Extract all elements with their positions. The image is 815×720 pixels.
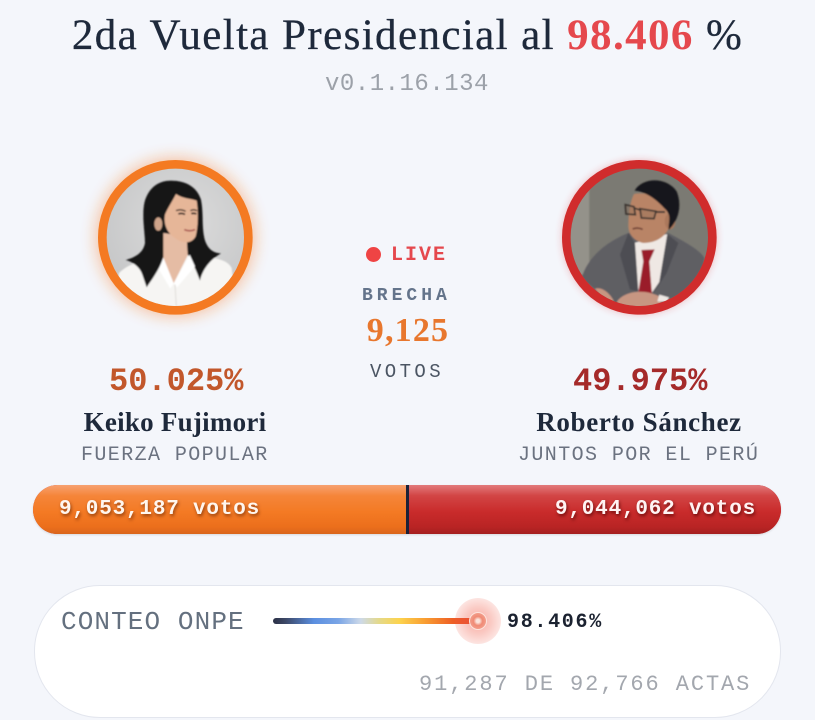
- suit: [582, 233, 704, 308]
- shirt: [118, 254, 233, 306]
- candidate name: Fujimori: Keiko Fujimori: [84, 407, 266, 437]
- candidate percent: Fujimori: 50.025%: [109, 363, 243, 400]
- votes: Sánchez: 9,044,062 votos: [555, 498, 756, 521]
- lapels: [620, 233, 678, 295]
- face: [165, 194, 198, 242]
- version label: v0.1.16.134: [325, 71, 489, 98]
- gap value: 9,125: [367, 312, 449, 349]
- panel: conteo ONPE: [34, 585, 781, 718]
- ear: [154, 217, 162, 231]
- portrait: Keiko Fujimori: [86, 148, 264, 326]
- party: Fuerza Popular: FUERZA POPULAR: [81, 444, 269, 467]
- tie: [638, 249, 655, 294]
- collar: [159, 255, 195, 289]
- ear: [665, 213, 675, 229]
- gap label: BRECHA: [362, 286, 451, 306]
- glasses: [625, 205, 656, 219]
- progress track: [273, 618, 477, 624]
- mouth: [633, 228, 643, 229]
- neck: [163, 233, 188, 283]
- candidate percent: Sánchez: 49.975%: [573, 363, 707, 400]
- background column: [570, 190, 590, 275]
- icon: live dot: [366, 247, 381, 262]
- candidate name: Sánchez: Roberto Sánchez: [536, 407, 742, 437]
- bar divider: [406, 485, 409, 534]
- votes: Fujimori: 9,053,187 votos: [59, 498, 260, 521]
- progress marker: [455, 598, 501, 644]
- votes label: VOTOS: [370, 361, 444, 383]
- hair: [635, 180, 679, 230]
- brows, eyes, lips: [176, 210, 197, 211]
- shirt: [634, 234, 667, 295]
- title: 2da Vuelta Presidencial al 98.406 %: [72, 12, 743, 59]
- party: Juntos por el Perú: JUNTOS POR EL PERÚ: [518, 444, 759, 467]
- live indicator: [366, 244, 447, 267]
- progress percent: 98.406%: [507, 611, 603, 634]
- neck and face: [628, 193, 670, 243]
- hands: [595, 288, 662, 308]
- live label: LIVE: [391, 244, 447, 267]
- panel label: CONTEO ONPE: [61, 607, 245, 637]
- actas count: 91,287 DE 92,766 ACTAS: [419, 672, 751, 697]
- bar segment: Sánchez: [409, 485, 781, 534]
- portrait: Roberto Sánchez: [558, 156, 721, 319]
- hair: [126, 181, 221, 287]
- bar segment: Fujimori: [33, 485, 406, 534]
- vote share bar: [33, 485, 781, 534]
